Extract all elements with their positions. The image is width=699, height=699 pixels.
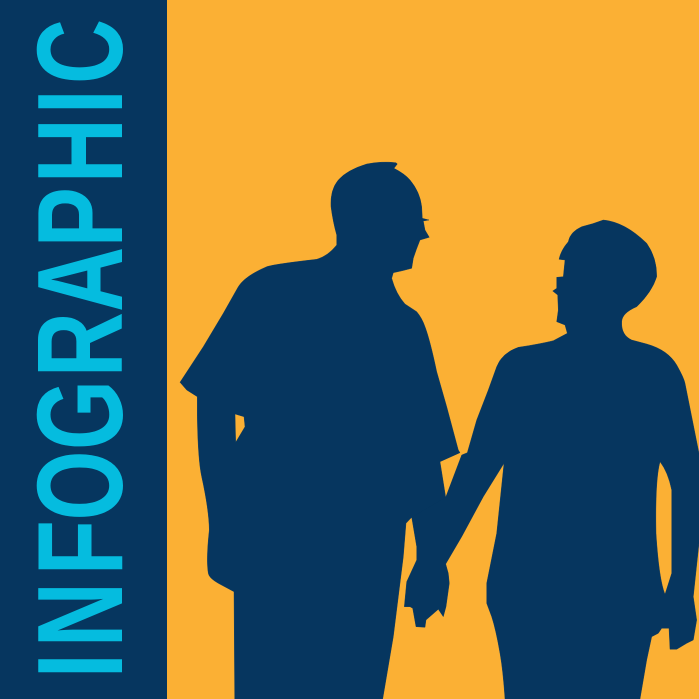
title: vertical INFOGRAPHIC: INFOGRAPHIC [12,19,148,678]
panel: navy sidebar [0,0,167,699]
silhouette: man [180,162,460,699]
silhouette: woman with joined hands [404,220,699,699]
illustration: couple silhouette [180,162,699,699]
